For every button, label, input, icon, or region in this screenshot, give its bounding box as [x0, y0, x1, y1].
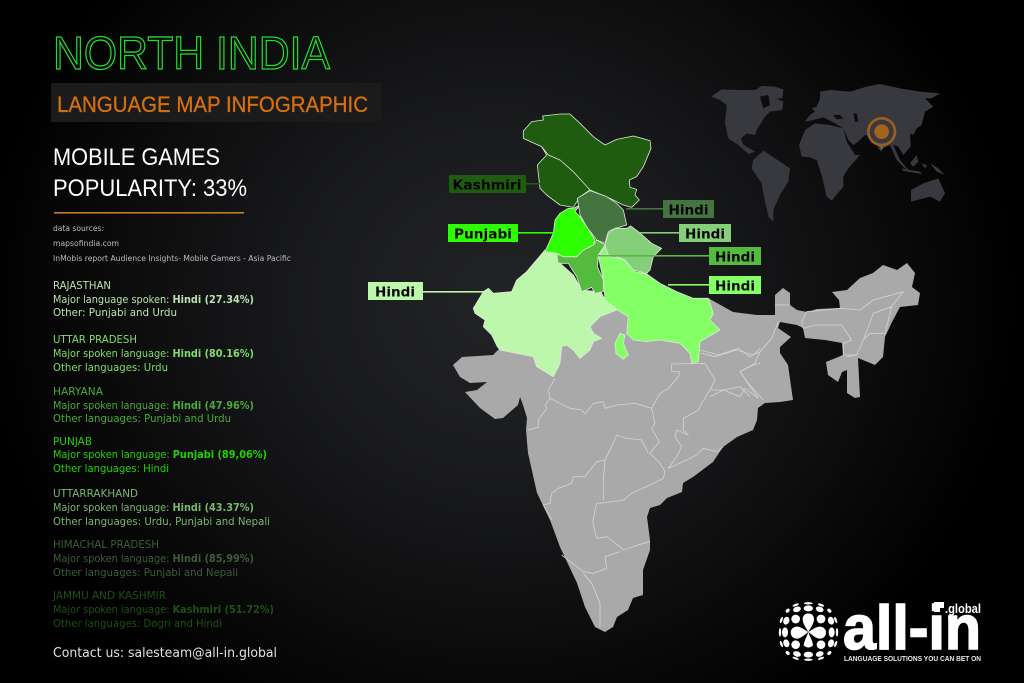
label: Kashmiri: Kashmiri: [452, 178, 522, 194]
contact line: Contact us: salesteam@all-in.global: [53, 645, 277, 661]
text block: Punjab: [53, 436, 267, 475]
text block: Uttar Pradesh: Major spoken language: Hindi (80.16%): [53, 348, 254, 360]
state: Uttarakhand: [605, 226, 662, 273]
text block: Himachal Pradesh: [53, 539, 254, 579]
label: Hindi Uttarakhand: [640, 224, 731, 242]
text block: Haryana: Major spoken language: Hindi (47.96%): [53, 400, 254, 412]
text block: Punjab: PUNJAB: [53, 436, 92, 448]
text block: Rajasthan: Other: Punjabi and Urdu: [53, 307, 177, 319]
label: Punjabi: [448, 224, 553, 242]
label: Hindi Haryana: Hindi: [715, 250, 755, 266]
text block: Punjab: Other languages: Hindi: [53, 463, 169, 475]
state: Punjab: [545, 205, 595, 257]
text block: Punjab: Major spoken language: Punjabi (89,06%): [53, 449, 267, 461]
logo wordmark: all-in: [843, 594, 981, 663]
label: Hindi Haryana: [600, 247, 761, 266]
world map with location pin: [711, 84, 945, 222]
label: Kashmiri: [449, 175, 540, 194]
text block: Haryana: HARYANA: [53, 386, 104, 398]
text block: Uttarakhand: Major spoken language: Hindi (43.37%): [53, 502, 254, 514]
label: Hindi Himachal Pradesh: [626, 200, 714, 218]
state: Himachal Pradesh: [577, 191, 627, 243]
text block: Haryana: Other languages: Punjabi and Urdu: [53, 413, 231, 425]
text block: Himachal Pradesh: HIMACHAL PRADESH: [53, 539, 159, 551]
logo: all-in global: .global: [945, 601, 981, 616]
mobile games popularity stat: POPULARITY: 33%: [53, 175, 247, 202]
north-east state borders: [700, 292, 903, 400]
text block: Uttar Pradesh: UTTAR PRADESH: [53, 334, 137, 346]
data sources: InMobis report Audience Insights- Mobile Gamers - Asia Pacific: [53, 254, 291, 263]
text block: Haryana: [53, 386, 254, 425]
text block: Jammu and Kashmir: Major spoken language: Kashmiri (51.72%): [53, 604, 274, 616]
location pin: [868, 118, 895, 150]
data sources: data sources:: [53, 224, 104, 233]
label: Hindi Uttar Pradesh: [668, 276, 761, 294]
logo tagline: LANGUAGE SOLUTIONS YOU CAN BET ON: [844, 654, 981, 663]
subtitle banner: [51, 83, 381, 122]
title: NORTH INDIA: [53, 27, 330, 79]
text block: Jammu and Kashmir: [52, 590, 274, 630]
state: Haryana: [557, 240, 605, 293]
text block: Rajasthan: Major language spoken: Hindi (27.34%): [53, 294, 254, 306]
logo: all-in global: [779, 594, 981, 663]
state: Uttar Pradesh: [598, 245, 720, 363]
label: Hindi Rajasthan: Hindi: [375, 284, 415, 300]
label: Hindi Uttar Pradesh: Hindi: [715, 278, 755, 294]
label: Hindi Himachal Pradesh: Hindi: [668, 202, 708, 218]
text block: Rajasthan: RAJASTHAN: [53, 280, 111, 292]
text block: Uttarakhand: UTTARRAKHAND: [53, 488, 138, 500]
subtitle banner: LANGUAGE MAP INFOGRAPHIC: [57, 92, 368, 117]
southern and central state borders: [528, 348, 760, 627]
data sources: [53, 224, 291, 263]
text block: Uttar Pradesh: [53, 334, 254, 374]
label: Punjabi: Punjabi: [454, 226, 512, 242]
state: Jammu and Kashmir: [523, 114, 651, 207]
text block: Uttarakhand: [53, 488, 270, 528]
data sources: mapsofindia.com: [53, 239, 119, 248]
label: Hindi Uttarakhand: Hindi: [685, 226, 725, 242]
text block: Uttar Pradesh: Other languages: Urdu: [53, 362, 168, 374]
Americas: [711, 86, 790, 222]
text block: Rajasthan: [53, 280, 254, 319]
text block: Jammu and Kashmir: Other languages: Dogri and Hindi: [53, 618, 222, 630]
map: rest of India in grey: [453, 263, 920, 632]
label: Hindi Rajasthan: [368, 282, 486, 300]
mobile games popularity stat: MOBILE GAMES: [53, 144, 220, 171]
text block: Jammu and Kashmir: JAMMU AND KASHMIR: [52, 590, 166, 602]
map: north India states: [473, 114, 720, 377]
mobile games popularity stat: [53, 144, 247, 202]
text block: Himachal Pradesh: Other languages: Punjabi and Nepali: [53, 567, 238, 579]
Africa, Eurasia and Australia: [799, 84, 945, 202]
state: Rajasthan: [473, 250, 617, 377]
logo globe icon: [779, 602, 838, 661]
text block: Himachal Pradesh: Major spoken language: Hindi (85,99%): [53, 553, 254, 565]
text block: Uttarakhand: Other languages: Urdu, Punjabi and Nepali: [53, 516, 270, 528]
